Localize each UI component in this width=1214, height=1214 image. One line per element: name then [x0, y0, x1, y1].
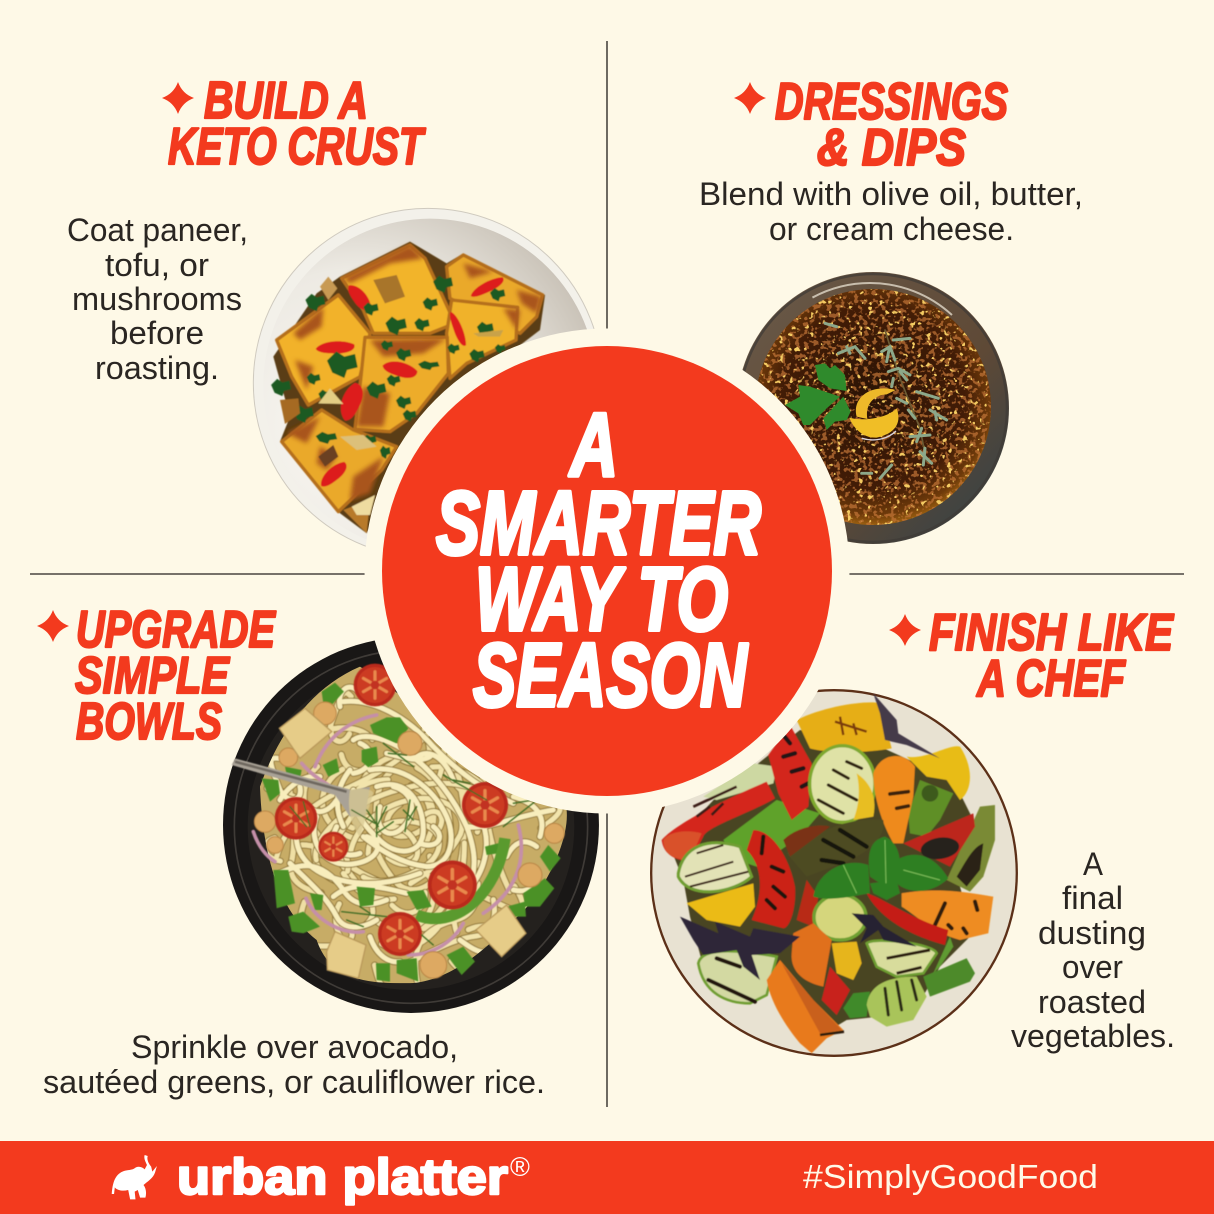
text: finish like a chef description: roasted [1038, 984, 1146, 1020]
text: build a keto crust description: before [110, 315, 204, 351]
image: black bowl of noodle salad [223, 640, 599, 1013]
text: finish like a chef description: vegetables. [1011, 1018, 1175, 1054]
text: upgrade bowls description [43, 1029, 545, 1100]
text: upgrade bowls description: Sprinkle over avocado, [131, 1029, 458, 1065]
panel: build a keto crust [67, 72, 603, 558]
text: finish like a chef description [1011, 846, 1175, 1054]
heading: upgrade simple bowls: BOWLS [76, 693, 222, 751]
title: SMARTER [436, 474, 761, 574]
panel: upgrade simple bowls [37, 601, 620, 1100]
heading: dressings and dips: DRESSINGS [775, 73, 1008, 131]
title: WAY TO [475, 550, 728, 650]
text: build a keto crust description [67, 212, 248, 386]
title: A [569, 396, 618, 496]
heading: dressings and dips [734, 73, 1008, 177]
text: build a keto crust description: mushrooms [72, 281, 242, 317]
text: dressings description: or cream cheese. [769, 211, 1014, 247]
title [436, 396, 761, 726]
image: bowl of roasted tofu [253, 208, 603, 558]
footer bar [0, 1141, 1214, 1214]
central badge [364, 328, 850, 814]
icon: tofu cubes [279, 708, 526, 978]
panel: finish like a chef [650, 604, 1175, 1057]
icon: dill [290, 743, 535, 945]
heading: finish like a chef [889, 604, 1174, 708]
text: build a keto crust description: Coat paneer, [67, 212, 248, 248]
heading: build a keto crust: BUILD A [204, 72, 368, 130]
heading: upgrade simple bowls: UPGRADE [76, 601, 276, 659]
logo text: urban platter [177, 1149, 508, 1205]
icon: red onion strips [253, 715, 521, 955]
text: dressings description [699, 176, 1083, 247]
panel: dressings and dips [699, 73, 1083, 544]
icon: parsley [785, 363, 851, 430]
icon: lemon twist [849, 388, 898, 440]
hashtag: #SimplyGoodFood [803, 1158, 1098, 1195]
heading: upgrade simple bowls [37, 601, 276, 751]
icon: chickpeas [254, 702, 564, 978]
icon: thyme sprig [825, 323, 947, 478]
icon: cherry tomatoes [275, 664, 508, 956]
heading: build a keto crust [162, 72, 426, 176]
image: glass dish of seasoned oil [737, 272, 1009, 544]
text: upgrade bowls description: sautéed greens, or cauliflower rice. [43, 1064, 545, 1100]
icon: basil leaves [813, 837, 948, 900]
heading: build a keto crust: KETO CRUST [168, 118, 426, 176]
heading: upgrade simple bowls: SIMPLE [75, 647, 230, 705]
heading: dressings and dips: & DIPS [817, 119, 966, 177]
text: finish like a chef description: final [1062, 880, 1123, 916]
text: finish like a chef description: A [1083, 846, 1104, 882]
text: finish like a chef description: dusting [1038, 915, 1146, 951]
text: finish like a chef description: over [1062, 949, 1123, 985]
icon: fork [232, 758, 373, 837]
icon: elephant logo [112, 1155, 157, 1199]
heading: finish like a chef: A CHEF [975, 650, 1126, 708]
title: SEASON [473, 626, 748, 726]
text: build a keto crust description: tofu, or [105, 247, 209, 283]
text: build a keto crust description: roasting. [95, 350, 219, 386]
image: plate of grilled vegetables [650, 689, 1018, 1057]
icon: green pepper pieces [262, 683, 561, 982]
logo text: ® [510, 1152, 530, 1182]
text: dressings description: Blend with olive oil, butter, [699, 176, 1083, 212]
